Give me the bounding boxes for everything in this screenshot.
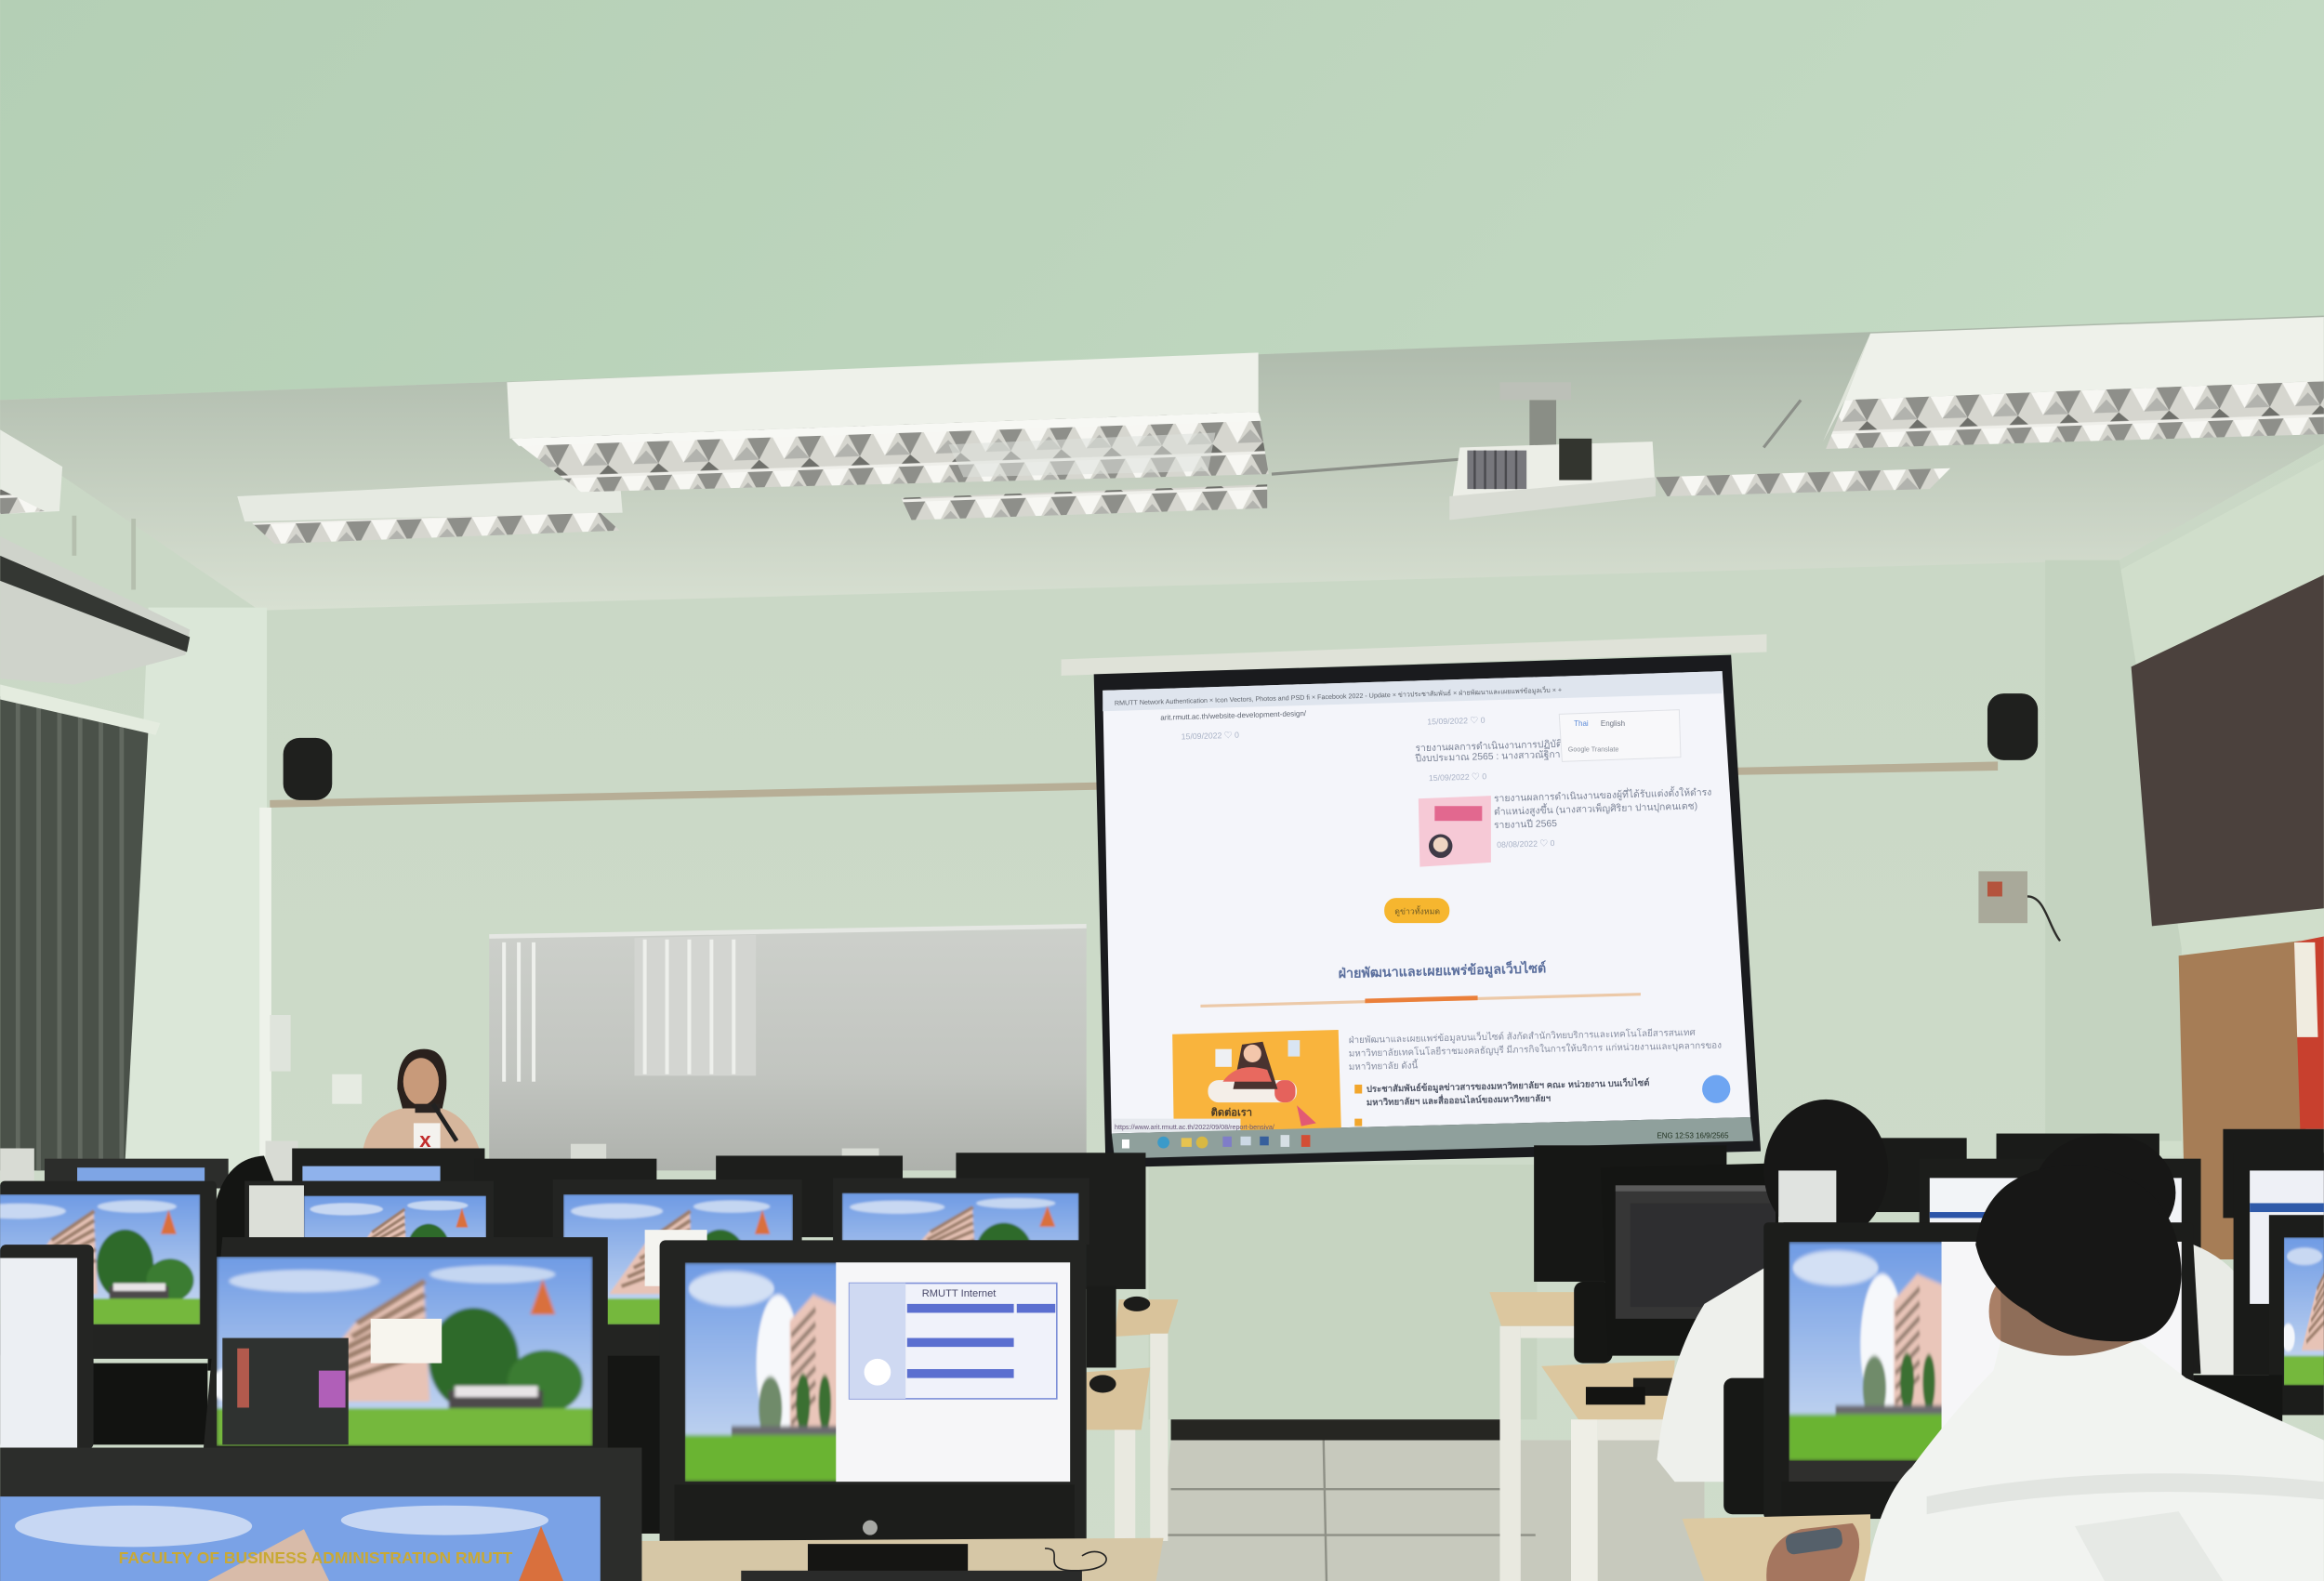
section heading: ฝ่ายพัฒนาและเผยแพร่ข้อมูลเว็บไซต์ — [1338, 958, 1546, 982]
monitor dark software — [1601, 1163, 1778, 1356]
description paragraph — [1349, 1026, 1722, 1073]
desk middle right — [1541, 1360, 1681, 1581]
dark gap between rows — [74, 1364, 207, 1444]
teacher: x — [419, 1128, 431, 1152]
second row monitor centre-left — [244, 1181, 494, 1299]
back row monitor left — [292, 1148, 484, 1185]
report text two — [1494, 785, 1711, 831]
report text two: รายงานผลการดำเนินงานของผู้ที่ได้รับแต่งตั้งให้ดำรง — [1494, 785, 1711, 804]
description paragraph: มหาวิทยาลัยเทคโนโลยีราชมงคลธัญบุรี มีภารกิจในการให้บริการ แก่หน่วยงานและบุคลากรของ — [1349, 1040, 1722, 1060]
third row monitor centre: RMUTT Internet — [922, 1288, 997, 1299]
orange contact illustration: ติดต่อเรา — [1211, 1106, 1252, 1118]
date lower: 08/08/2022 ♡ 0 — [1497, 838, 1555, 850]
wall box — [1978, 871, 2060, 941]
date top right: 15/09/2022 ♡ 0 — [1427, 716, 1486, 727]
messenger button — [1702, 1075, 1730, 1103]
taskbar: ENG 12:53 16/9/2565 — [1657, 1131, 1729, 1140]
google translate popup: Google Translate — [1568, 745, 1618, 753]
second row monitor right — [833, 1178, 1089, 1304]
heading underline — [1200, 993, 1641, 1008]
desk foreground — [1683, 1514, 1870, 1581]
projection screen frame — [1094, 655, 1761, 1167]
google translate popup: Thai — [1574, 719, 1589, 728]
third row monitor far left — [0, 1245, 94, 1449]
report text two: ตำแหน่งสูงขึ้น (นางสาวเพ็ญศิริยา ปานปุกคนเดช) — [1494, 798, 1697, 818]
right back black monitor — [1534, 1145, 1726, 1282]
button see all news — [1384, 898, 1449, 923]
browser tab bar — [1103, 671, 1723, 711]
right curtain — [2132, 575, 2324, 926]
air conditioner — [0, 516, 190, 685]
speaker right — [1987, 693, 2038, 760]
far right monitor — [2234, 1153, 2324, 1375]
ceiling light left — [237, 477, 623, 544]
student back middle — [1657, 1100, 1888, 1482]
back row monitor far left — [45, 1159, 229, 1189]
status url — [1113, 1119, 1274, 1132]
wood wall rail right — [1737, 761, 1998, 775]
ceiling light centre large — [507, 352, 1269, 492]
third row monitor centre — [660, 1240, 1087, 1547]
status url: https://www.arit.rmutt.ac.th/2022/09/08/report-bensiya/ — [1115, 1124, 1274, 1131]
left curtain — [0, 685, 160, 1170]
side monitor stand — [1087, 1286, 1116, 1367]
floor — [1156, 1419, 1704, 1581]
description paragraph: มหาวิทยาลัย ดังนี้ — [1349, 1058, 1419, 1073]
privacy cards back row — [0, 1141, 879, 1181]
ceiling light left edge — [0, 429, 62, 514]
ceiling — [0, 316, 2324, 611]
monitor behind foreground student — [1920, 1159, 2201, 1374]
projector — [1272, 382, 1801, 520]
back row monitors black — [474, 1153, 1145, 1289]
orange contact illustration — [1172, 1030, 1341, 1135]
projection screen — [1103, 671, 1753, 1159]
screen roller housing — [1062, 634, 1766, 676]
report text two: รายงานปี 2565 — [1494, 818, 1557, 831]
taskbar — [1112, 1117, 1753, 1159]
chair dark middle — [1574, 1282, 1613, 1364]
front row monitor: FACULTY OF BUSINESS ADMINISTRATION RMUTT — [119, 1548, 513, 1567]
wall switch — [332, 1074, 362, 1104]
report text one: รายงานผลการดำเนินงานการปฏิบัติราชการของบุค — [1415, 737, 1626, 754]
speaker left — [284, 738, 332, 800]
browser tab bar: RMUTT Network Authentication × Icon Vectors, Photos and PSD fi × Facebook 2022 - Update × ข่าวประชาสัมพันธ์ × ฝ่ายพัฒนาและเผยแพร่ข้อมูลเว็บ × + — [1115, 685, 1562, 707]
google translate popup: English — [1601, 719, 1625, 728]
wall column right — [2045, 560, 2182, 1141]
news thumbnail — [1419, 796, 1491, 867]
wall outlets — [270, 1015, 291, 1072]
report text one: ปีงบประมาณ 2565 : นางสาวณัฐิกา มีชีวงษ์ — [1415, 747, 1592, 764]
google translate popup — [1559, 710, 1681, 761]
student back right — [2033, 1134, 2270, 1375]
ceiling light centre back — [901, 484, 1267, 520]
right back monitors row — [1860, 1129, 2324, 1222]
desks left side — [1087, 1297, 1179, 1541]
desk far right row — [1489, 1292, 1580, 1581]
third row monitor back dark — [601, 1356, 667, 1534]
foreground monitor — [1763, 1222, 2194, 1519]
upper soffit wall — [0, 0, 2324, 400]
teacher — [363, 1049, 486, 1178]
bullet list: ประชาสัมพันธ์ข้อมูลข่าวสารของมหาวิทยาลัยฯ คณะ หน่วยงาน บนเว็บไซต์ — [1367, 1076, 1650, 1096]
second row monitor left — [0, 1181, 217, 1359]
whiteboard — [489, 926, 1087, 1170]
desk bottom left — [641, 1538, 1164, 1581]
left column — [125, 608, 267, 1170]
ceiling light right large — [1823, 317, 2324, 449]
bullet list: มหาวิทยาลัยฯ และสื่อออนไลน์ของมหาวิทยาลัยฯ — [1367, 1091, 1551, 1108]
button see all news: ดูข่าวทั้งหมด — [1394, 905, 1440, 917]
dark chair left — [207, 1155, 297, 1371]
door — [2179, 937, 2324, 1259]
chair front — [1723, 1378, 1780, 1514]
lower wall strip — [1149, 1165, 1537, 1419]
left conduit — [259, 808, 271, 1155]
third row monitor centre-left — [204, 1237, 608, 1452]
address bar: arit.rmutt.ac.th/website-development-design/ — [1160, 709, 1307, 722]
report text one — [1415, 737, 1626, 764]
description paragraph: ฝ่ายพัฒนาและเผยแพร่ข้อมูลบนเว็บไซต์ สังกัดสำนักวิทยบริการและเทคโนโลยีสารสนเทศ — [1349, 1026, 1697, 1046]
foreground student — [1766, 1165, 2324, 1581]
right side wall — [2119, 459, 2324, 1155]
date left: 15/09/2022 ♡ 0 — [1181, 731, 1239, 741]
far right front monitor — [2269, 1215, 2324, 1415]
second row monitor centre — [553, 1179, 802, 1387]
front row monitor — [0, 1448, 641, 1581]
chair right back — [2194, 1375, 2282, 1422]
wood wall rail left — [270, 783, 1097, 808]
date middle: 15/09/2022 ♡ 0 — [1429, 771, 1486, 783]
bullet list — [1354, 1076, 1650, 1126]
ceiling light right back — [1656, 468, 1950, 496]
